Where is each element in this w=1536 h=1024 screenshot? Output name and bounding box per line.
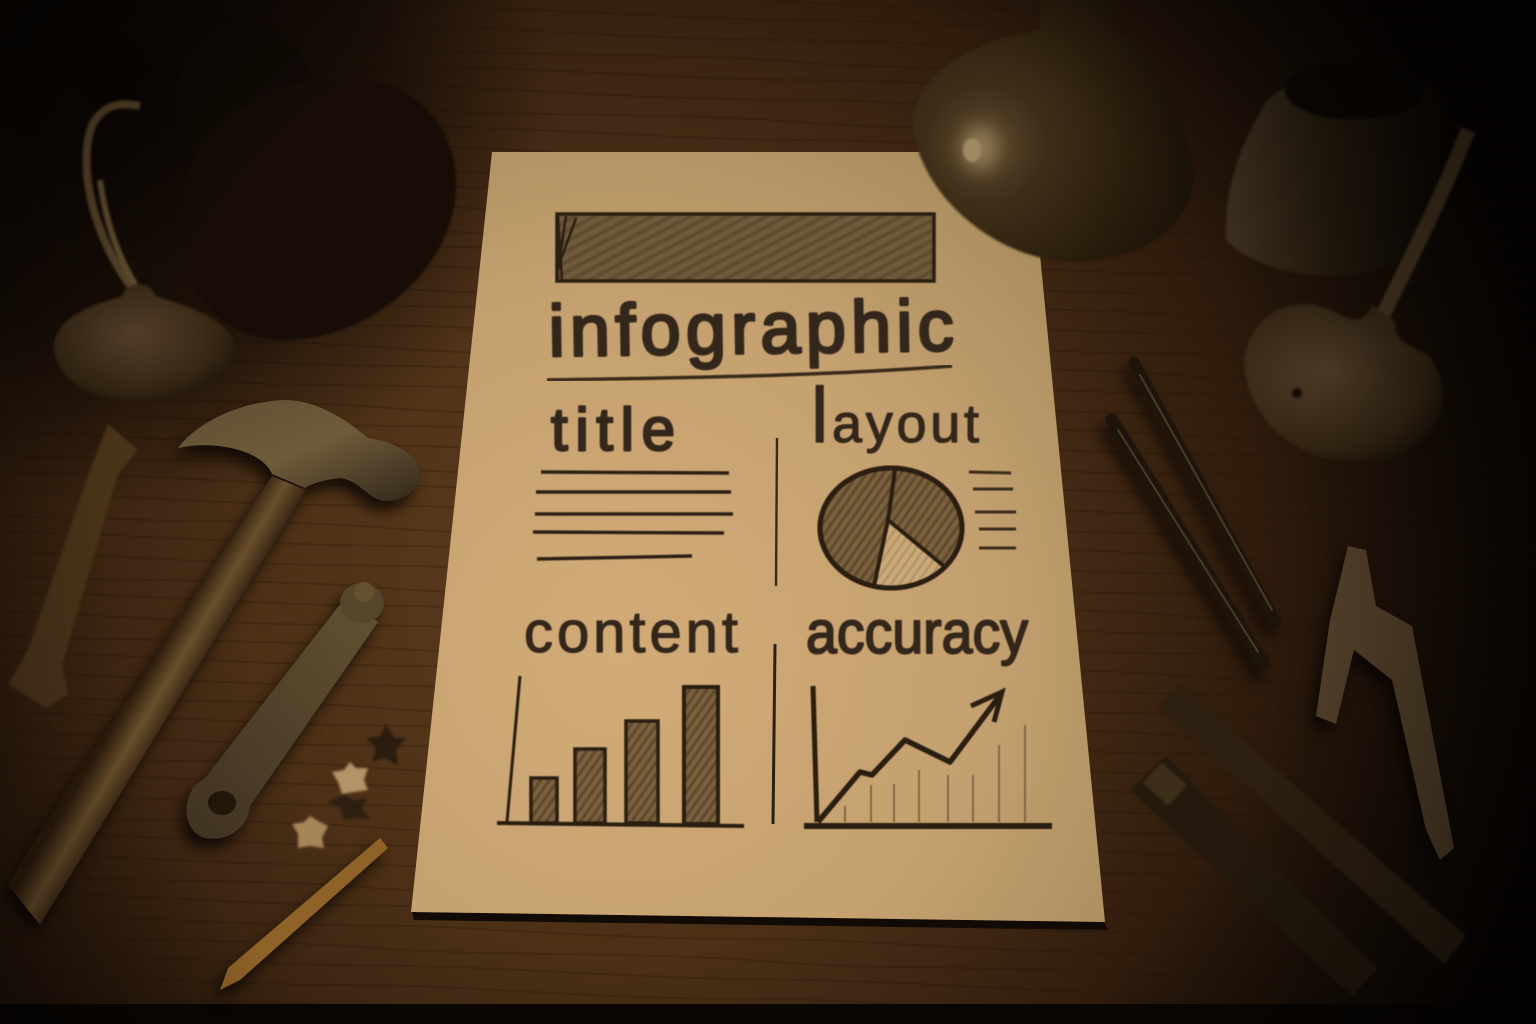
sheet of paper	[411, 152, 1108, 930]
metal canister	[1226, 60, 1456, 276]
title banner: shaded rectangle	[557, 214, 934, 281]
open wrench on the desk	[186, 582, 384, 839]
bar chart sketch	[497, 676, 744, 826]
section label: accuracy: accuracy	[806, 599, 1028, 666]
right lamp base and arm	[1244, 130, 1468, 462]
right desk lamp shade	[912, 0, 1194, 262]
text placeholder lines	[533, 472, 733, 559]
hammer	[8, 400, 420, 925]
line chart sketch with rising arrow	[804, 686, 1052, 826]
dark pencils right	[1112, 362, 1276, 664]
pie legend lines	[969, 472, 1016, 548]
metal star scraps	[292, 724, 406, 848]
pie chart sketch	[820, 468, 962, 588]
small wrench far left	[8, 424, 138, 708]
heading: infographic: infographic	[548, 286, 954, 372]
section label: title: title	[551, 396, 675, 463]
vertical divider upper	[776, 438, 777, 586]
flat metal rulers	[1130, 684, 1466, 996]
section label: layout: layout	[811, 371, 979, 459]
vertical divider lower	[773, 644, 775, 824]
pliers tool right	[1316, 546, 1454, 860]
left desk lamp (dark)	[54, 20, 456, 400]
wooden pencil	[220, 838, 388, 990]
section label: content: content	[524, 600, 738, 665]
heading underline	[547, 366, 952, 380]
